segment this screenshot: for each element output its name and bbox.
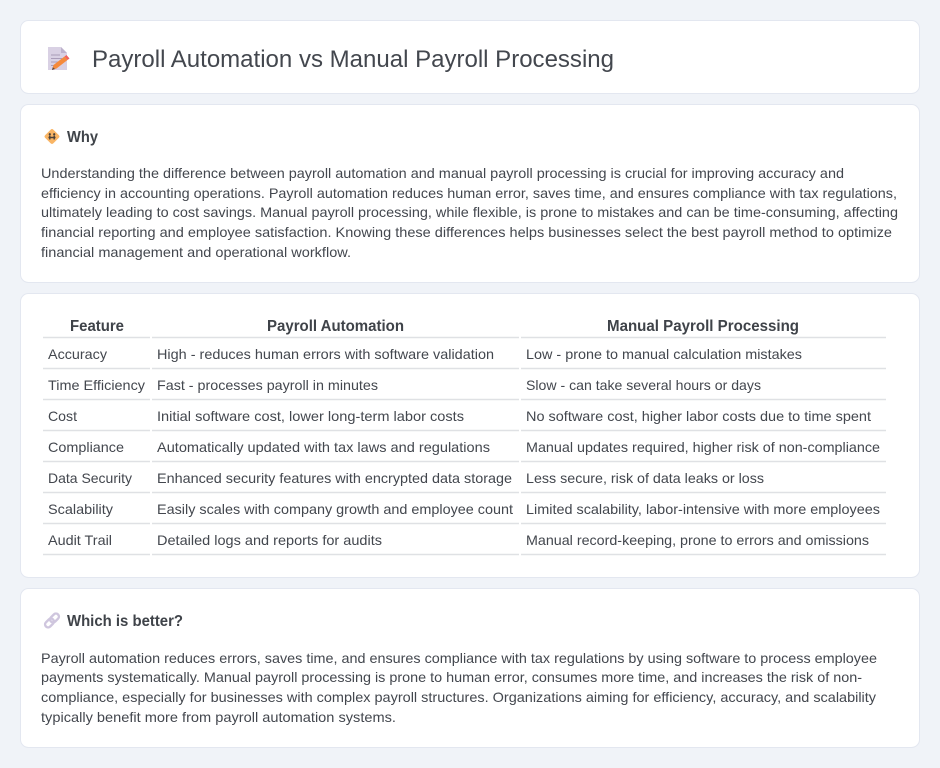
panel: title header [20, 20, 920, 94]
row: compliance [48, 439, 880, 455]
row: time efficiency: Fast - processes payroll in minutes [157, 377, 378, 393]
row: audit trail: Audit Trail [48, 532, 112, 548]
row: data security: Enhanced security features with encrypted data storage [157, 470, 512, 486]
row: audit trail [48, 532, 869, 548]
row: scalability: Limited scalability, labor-intensive with more employees [526, 501, 880, 517]
title: Payroll Automation vs Manual Payroll Processing [92, 46, 614, 73]
row: scalability [48, 501, 880, 517]
table header row: Manual Payroll Processing [607, 318, 799, 335]
row: compliance: Automatically updated with tax laws and regulations [157, 439, 490, 455]
text block: verdict [41, 650, 877, 725]
table header row [70, 318, 799, 335]
panel: which is better [20, 588, 920, 748]
heading: why: Why [67, 129, 98, 146]
panel: comparison table [20, 294, 920, 578]
table header row: Payroll Automation [267, 318, 404, 335]
row: time efficiency: Time Efficiency [48, 377, 145, 393]
icon: orange diamond sign [44, 128, 60, 145]
row: time efficiency: Slow - can take several hours or days [526, 377, 761, 393]
row: data security: Less secure, risk of data leaks or loss [526, 470, 764, 486]
icon: document with pencil [48, 47, 70, 70]
row: data security: Data Security [48, 470, 132, 486]
row: accuracy: Accuracy [48, 346, 107, 362]
text block: why explanation: efficiency in accounting operations. Payroll automation reduces human error, saves time, and ensures compliance with tax regulations, [41, 185, 897, 201]
row: cost: Cost [48, 408, 77, 424]
icon: chain link [44, 612, 60, 629]
row: scalability: Scalability [48, 501, 113, 517]
text block: verdict: payments systematically. Manual payroll processing is prone to human error, consumes more time, and increases the risk of non- [41, 669, 862, 685]
row: compliance: Compliance [48, 439, 124, 455]
row: data security [48, 470, 764, 486]
table header row: Feature [70, 318, 124, 335]
row: audit trail: Manual record-keeping, prone to errors and omissions [526, 532, 869, 548]
row: time efficiency [48, 377, 761, 393]
row: accuracy: High - reduces human errors with software validation [157, 346, 494, 362]
text block: why explanation: ultimately leading to cost savings. Manual payroll processing, while flexible, is prone to mistakes and can be time-consuming, affecting [41, 204, 898, 220]
row: cost [48, 408, 871, 424]
text block: why explanation: Understanding the difference between payroll automation and manual payroll processing is crucial for improving accuracy and [41, 165, 844, 181]
row: compliance: Manual updates required, higher risk of non-compliance [526, 439, 880, 455]
panel: why [20, 104, 920, 282]
row: accuracy: Low - prone to manual calculation mistakes [526, 346, 802, 362]
text block: verdict: compliance, especially for businesses with complex payroll structures. Organizations aiming for efficiency, accuracy, and scalability [41, 689, 876, 705]
heading: which is better: Which is better? [67, 613, 183, 630]
text block: why explanation: financial management and operational workflow. [41, 244, 351, 260]
row: audit trail: Detailed logs and reports for audits [157, 532, 382, 548]
row: accuracy [48, 346, 802, 362]
text block: why explanation [41, 165, 898, 260]
row: cost: No software cost, higher labor costs due to time spent [526, 408, 871, 424]
text block: why explanation: financial reporting and employee satisfaction. Knowing these differences helps businesses select the best payroll method to optimize [41, 224, 892, 240]
row: cost: Initial software cost, lower long-term labor costs [157, 408, 464, 424]
row: scalability: Easily scales with company growth and employee count [157, 501, 513, 517]
text block: verdict: typically benefit more from payroll automation systems. [41, 709, 396, 725]
text block: verdict: Payroll automation reduces errors, saves time, and ensures compliance with tax regulations by using software to process employee [41, 650, 877, 666]
